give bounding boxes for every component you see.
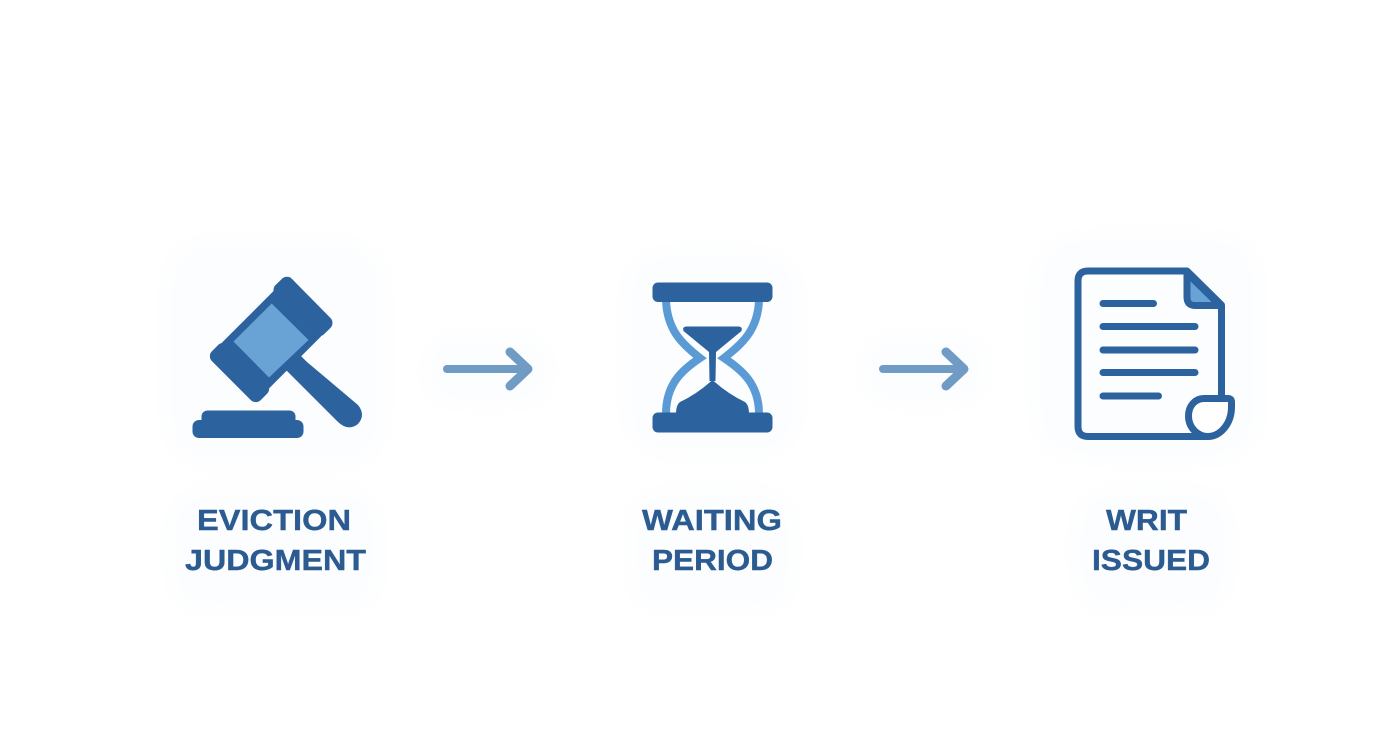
label: eviction judgment: EVICTION [197,505,351,537]
label: waiting period [642,505,782,577]
label: writ issued: ISSUED [1092,545,1210,577]
icon: document with seal [1078,271,1232,436]
label: eviction judgment: JUDGMENT [185,545,366,577]
label: waiting period: PERIOD [652,545,773,577]
document text lines [1103,304,1195,396]
arrow: waiting period to writ issued [883,352,964,386]
gavel head light panel [234,304,308,378]
gavel upper cap [271,274,335,339]
hourglass upper sand [683,326,742,381]
icon: hourglass [652,282,772,432]
step 1: eviction judgment [185,274,366,577]
label: eviction judgment [185,505,366,577]
arrow: judgment to waiting period [447,352,528,386]
document outline [1078,271,1222,436]
folded corner [1187,273,1220,306]
hourglass bottom bar [652,412,772,432]
label: writ issued: WRIT [1106,505,1187,537]
label: writ issued [1092,505,1210,577]
icon: gavel [192,274,362,438]
label: waiting period: WAITING [642,505,782,537]
gavel handle [286,353,362,427]
step 3: writ issued [1078,271,1232,577]
gavel lower cap [207,340,272,405]
hourglass glass sides [666,300,759,414]
gavel sound block [192,410,304,438]
hourglass lower sand [676,380,749,414]
gavel head body [223,291,320,388]
step 2: waiting period [642,282,782,577]
hourglass top bar [652,282,772,302]
seal [1188,398,1232,436]
